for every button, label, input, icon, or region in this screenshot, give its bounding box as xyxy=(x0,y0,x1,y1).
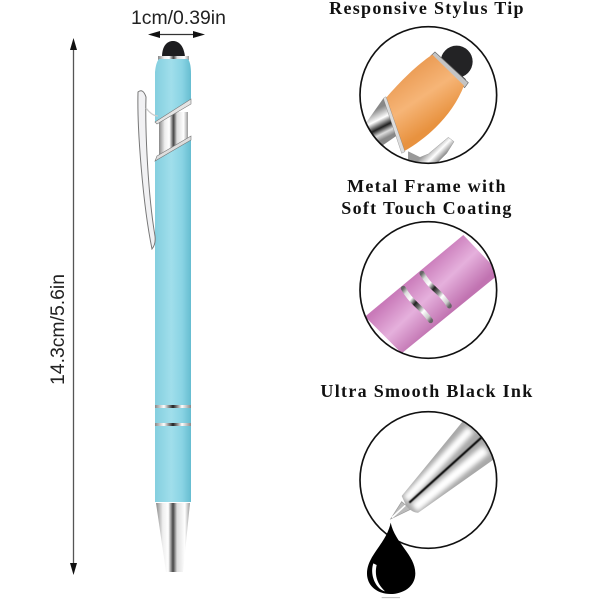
ink drop xyxy=(367,523,415,598)
metal stem xyxy=(366,98,396,145)
pen nib cone xyxy=(402,422,493,513)
neck xyxy=(444,60,466,80)
detail circle: stylus tip xyxy=(360,27,497,167)
lower barrel xyxy=(155,137,191,502)
heading: metal frame: Metal Frame with xyxy=(347,176,507,196)
pink barrel xyxy=(365,235,500,353)
metal rings xyxy=(155,405,191,408)
ball tip xyxy=(391,502,411,519)
ring outline xyxy=(360,27,497,163)
dimension: pen height: 14.3cm/5.6in xyxy=(47,274,69,385)
heading: metal frame xyxy=(341,176,513,218)
collar xyxy=(431,52,468,88)
silver bands xyxy=(403,288,431,321)
detail circle: coating xyxy=(360,222,500,358)
ring outline xyxy=(360,412,497,548)
silver mid section xyxy=(159,112,188,157)
detail circle: ink xyxy=(360,412,503,598)
metal tip xyxy=(156,503,190,572)
heading: metal frame: Soft Touch Coating xyxy=(341,198,513,218)
pen clip xyxy=(138,91,155,249)
clip end xyxy=(408,137,454,162)
rubber tip xyxy=(441,46,473,78)
upper barrel xyxy=(155,59,191,122)
heading: ink: Ultra Smooth Black Ink xyxy=(320,381,534,401)
ring outline xyxy=(360,222,497,358)
stylus tip xyxy=(162,41,185,57)
silver band xyxy=(383,97,405,153)
pen illustration xyxy=(138,41,191,572)
dimension: pen width: 1cm/0.39in xyxy=(131,7,226,29)
metal collar xyxy=(158,56,189,60)
orange barrel xyxy=(386,55,464,152)
dimension: pen height xyxy=(47,38,77,575)
